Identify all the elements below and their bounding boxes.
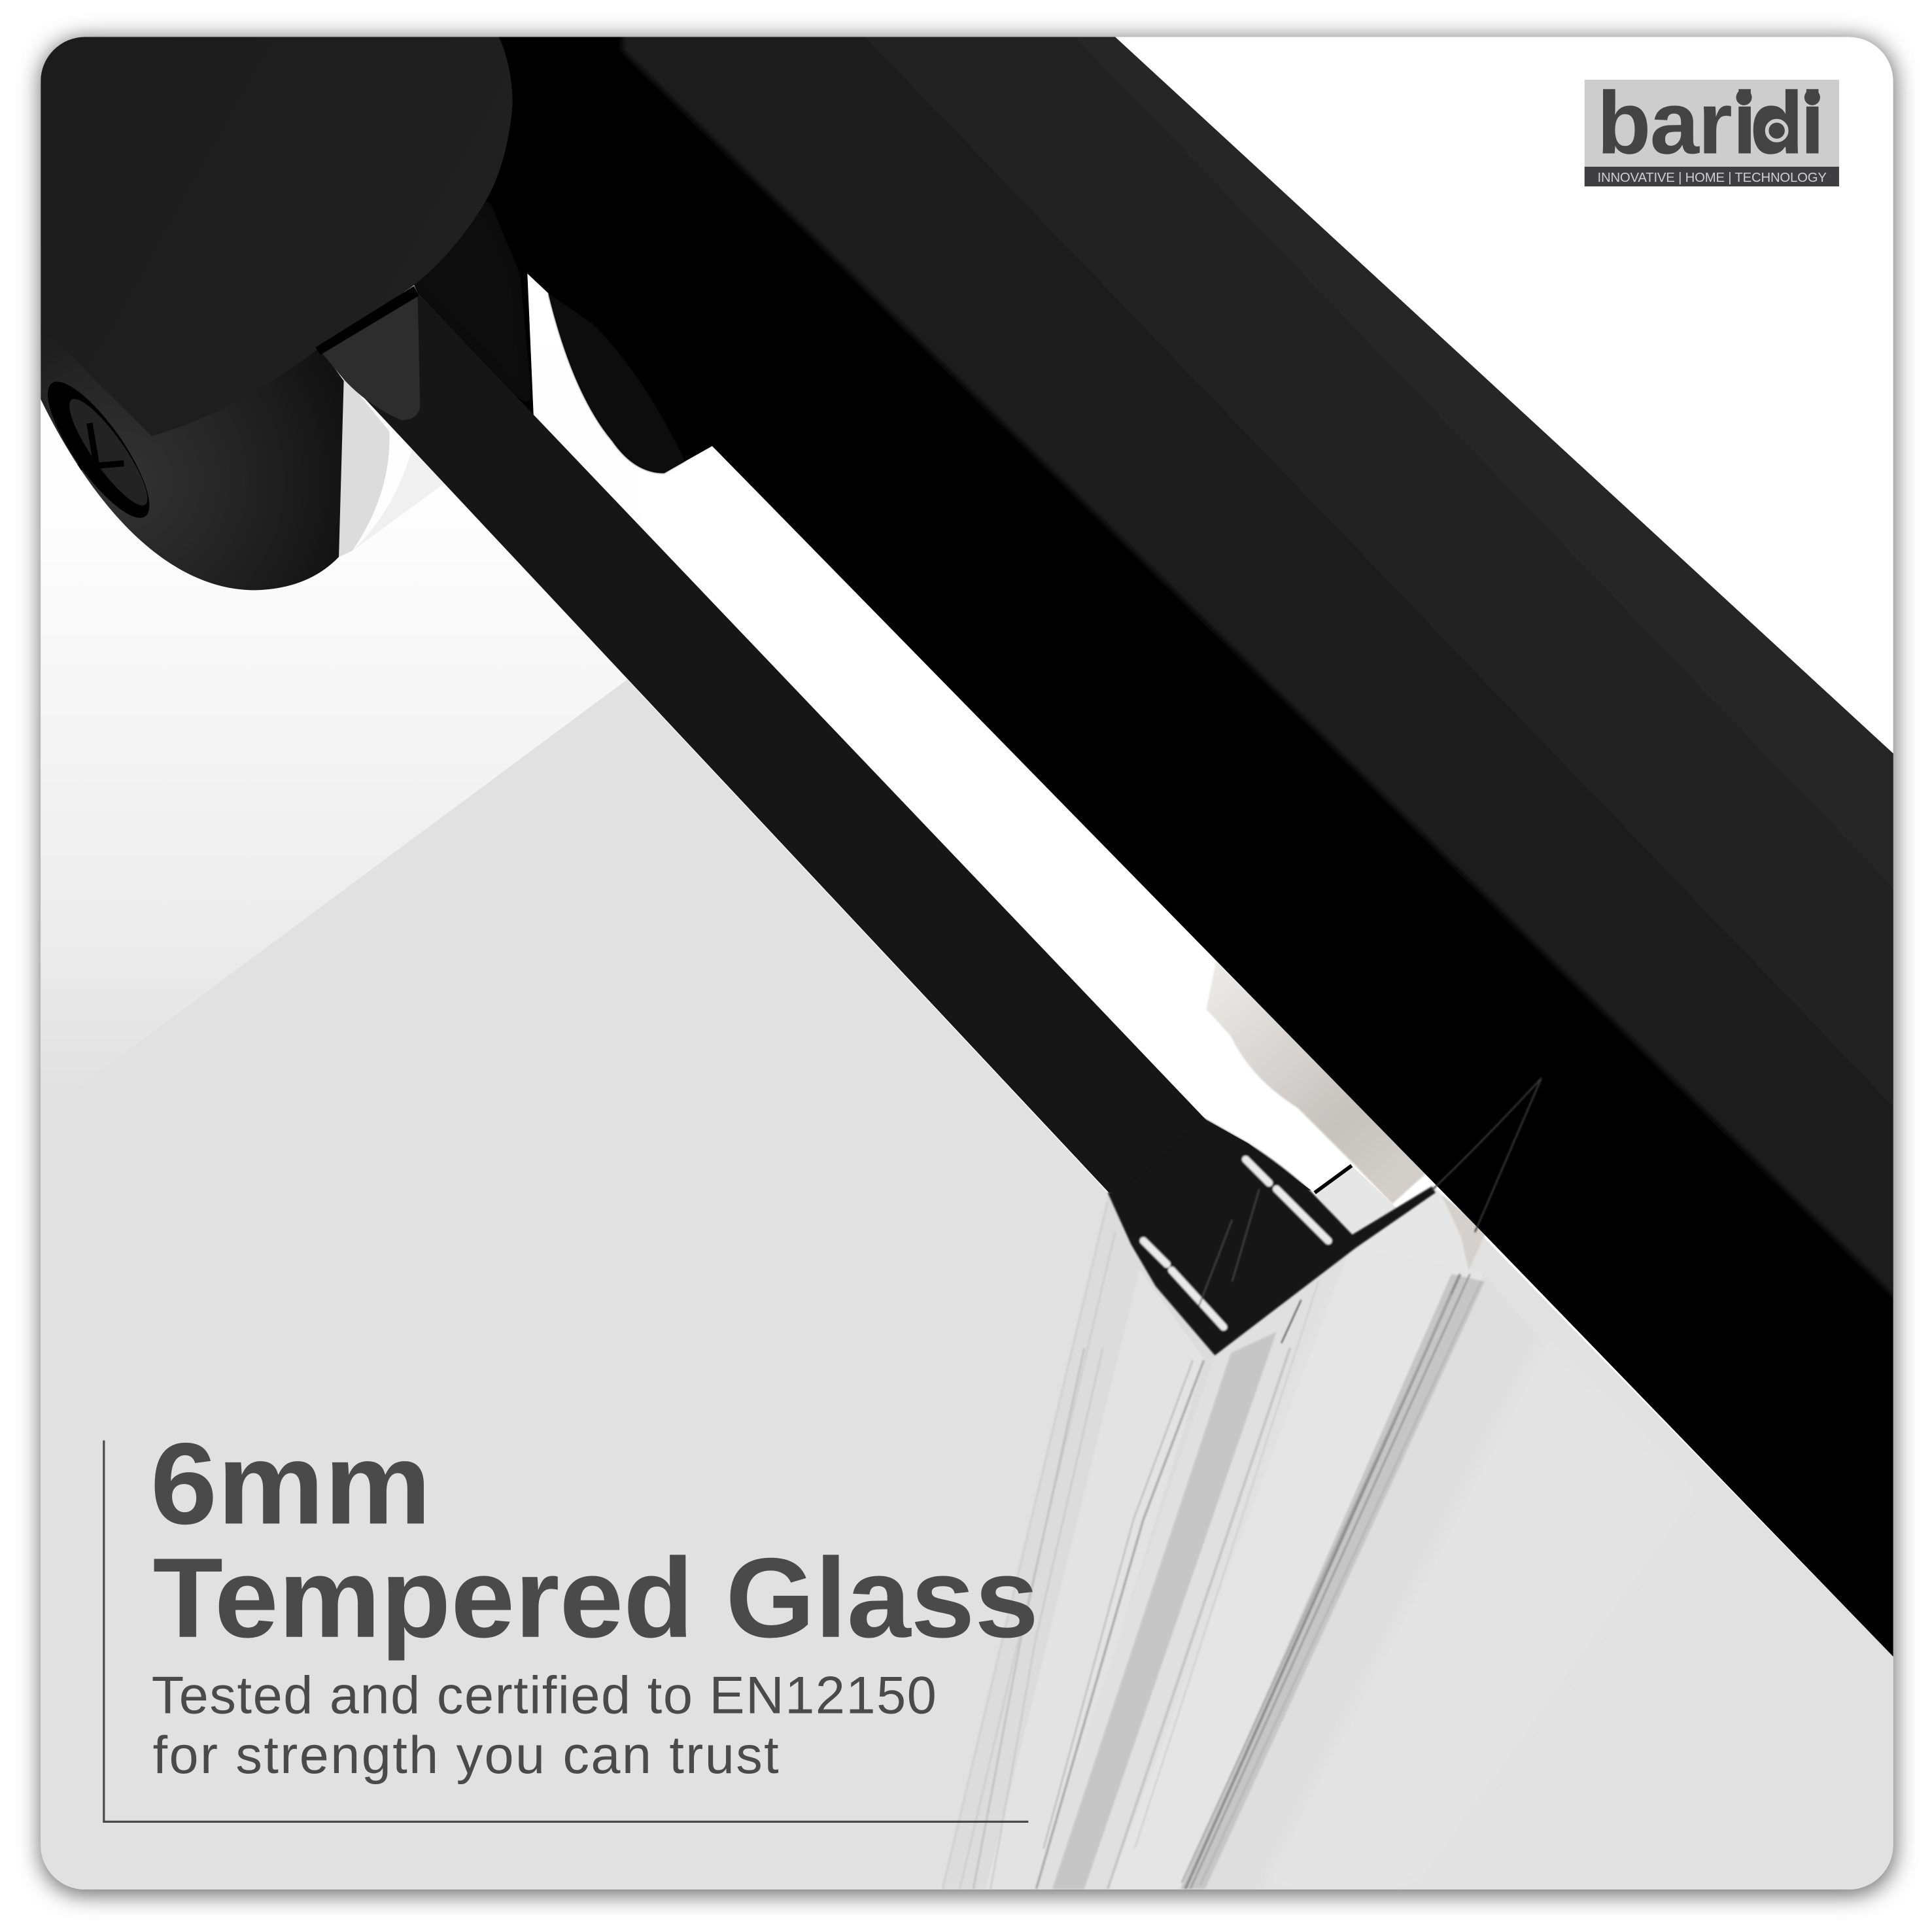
screw head	[32, 369, 165, 530]
text frame lines	[104, 1440, 1028, 1821]
thin seal fin	[1432, 1078, 1542, 1232]
central glass band	[1034, 1247, 1352, 1889]
left glass sheath	[941, 1195, 1215, 1889]
hinge top face	[41, 37, 513, 436]
dark seal ridge	[1181, 1274, 1485, 1889]
glass fine lines	[942, 1201, 1319, 1889]
logo wordmark: baridi	[1597, 73, 1825, 173]
gasket inner highlights	[1199, 1189, 1301, 1343]
hinge knuckle shading	[548, 293, 685, 473]
right glass panel	[1459, 1274, 1460, 1275]
subtext line 2: for strength you can trust	[153, 1726, 779, 1785]
black wire	[1315, 1165, 1352, 1193]
black frame rail	[370, 0, 1932, 1657]
light infill under wire	[1315, 1165, 1398, 1237]
hinge lower body	[41, 325, 344, 590]
logo tagline: INNOVATIVE | HOME | TECHNOLOGY	[1598, 171, 1827, 185]
logo	[1585, 73, 1839, 186]
hinge shade behind block	[370, 197, 534, 415]
gasket slot lower	[1143, 1241, 1224, 1327]
subtext line 1: Tested and certified to EN12150	[152, 1666, 937, 1725]
rubber gasket	[1108, 1078, 1542, 1355]
logo letter details	[1736, 90, 1820, 149]
metal bracket behind gasket	[1206, 961, 1486, 1270]
gasket slot upper	[1246, 1160, 1328, 1241]
wall reflection gradient	[41, 345, 641, 1133]
bar end facet	[320, 296, 420, 420]
headline: 6mm: 6mm	[150, 1419, 431, 1548]
logo panel	[1585, 80, 1839, 167]
hinge block	[32, 37, 534, 590]
headline: Tempered Glass: Tempered Glass	[153, 1534, 1039, 1661]
clear seal highlight	[1353, 1185, 1486, 1270]
glass channel bar	[315, 286, 1311, 1193]
glass edge streaks	[942, 1201, 1485, 1889]
logo band	[1585, 167, 1839, 186]
bar end shadow line	[315, 286, 419, 355]
grey lower background	[41, 680, 1894, 1890]
rail upper facet	[622, 0, 1932, 1374]
chrome reflection below hinge	[339, 379, 444, 557]
